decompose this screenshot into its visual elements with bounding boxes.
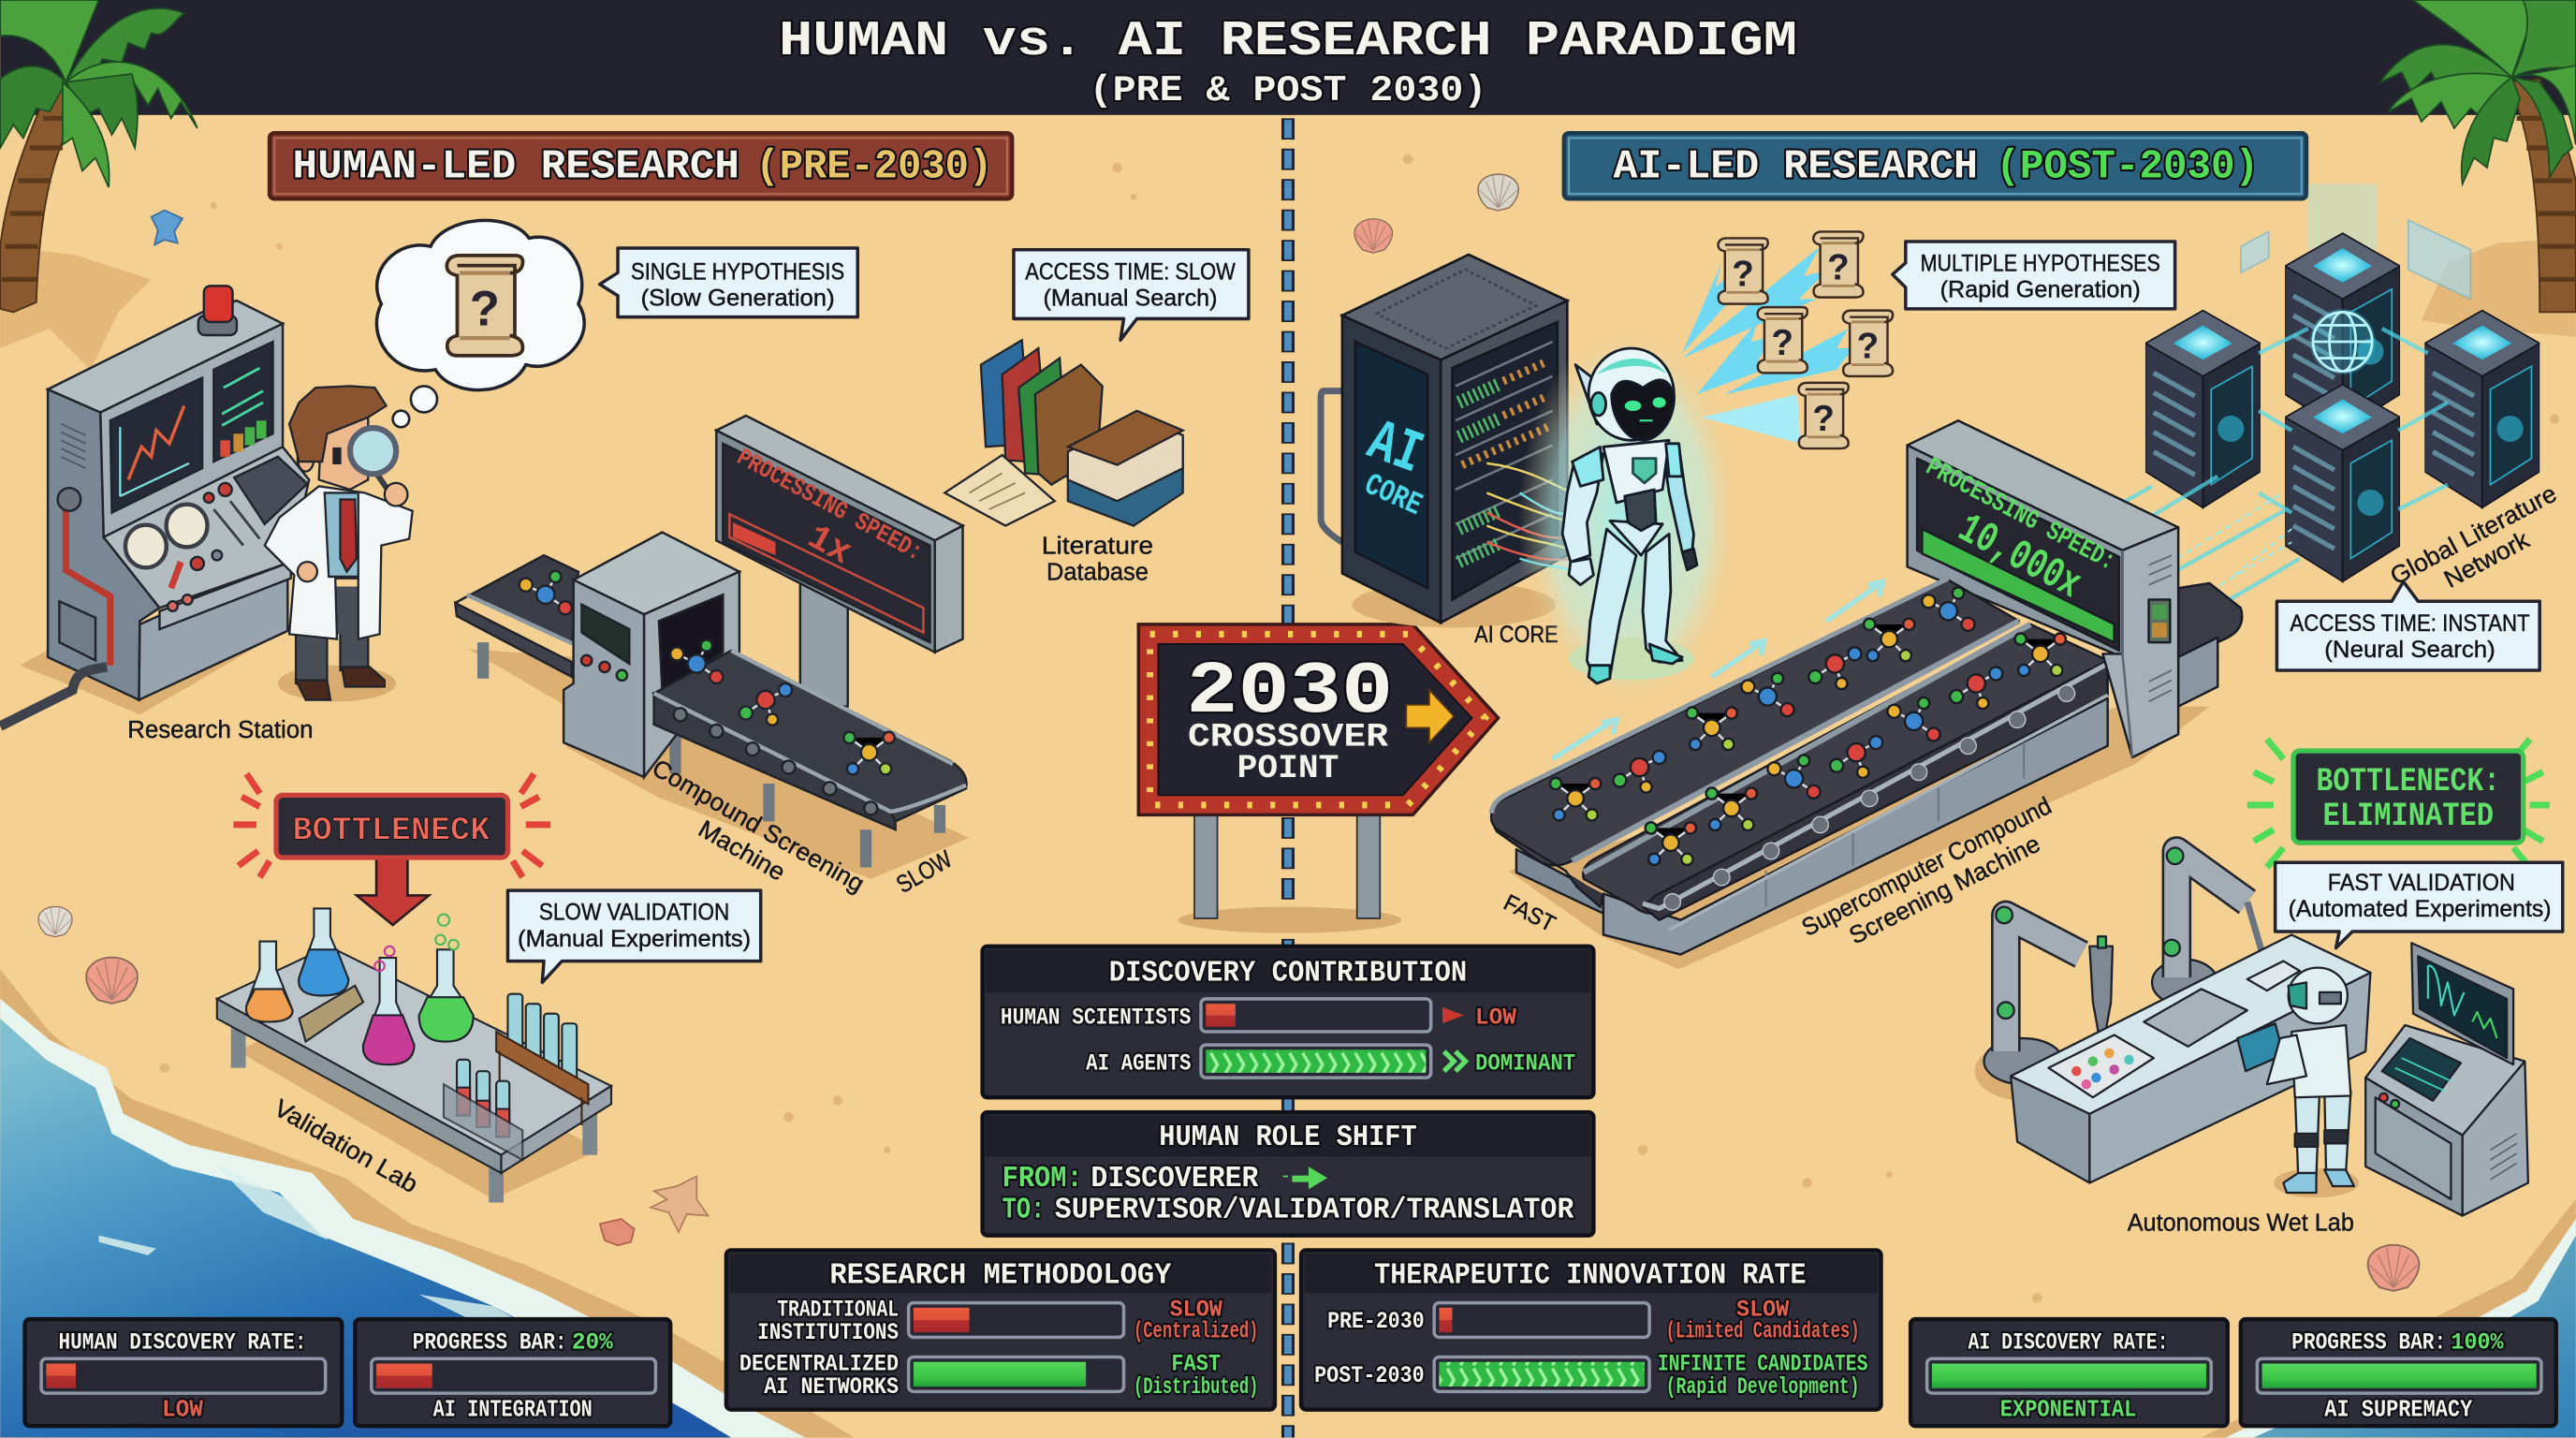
callout: slow validation: SLOW VALIDATION <box>539 901 729 926</box>
callout: single hypothesis <box>600 248 857 317</box>
panel: therapeutic innovation rate: (Rapid Development) <box>1666 1375 1860 1401</box>
label: supercomputer compound screening machine: Screening Machine <box>1844 829 2044 949</box>
compound screening machine <box>455 416 970 879</box>
AI robot <box>1518 324 1741 712</box>
right ocean and shoreline <box>2202 1199 2576 1437</box>
speed arrows on sand <box>1553 581 1882 759</box>
panel: research methodology: DECENTRALIZED <box>739 1353 899 1378</box>
label: global literature network: Global Literature <box>2385 479 2561 591</box>
hypotheses scrolls with beams: ? <box>1857 327 1879 367</box>
panel: human role shift: FROM: <box>1003 1163 1083 1196</box>
autonomous wet lab <box>1975 847 2528 1216</box>
callout: slow validation <box>507 890 761 982</box>
panel: human discovery rate <box>25 1319 342 1426</box>
label: validation lab: Validation Lab <box>270 1093 423 1198</box>
banner: human-led research: (PRE-2030) <box>755 144 992 191</box>
supercomputer compound screening machine: PROCESSING SPEED: <box>1921 453 2120 578</box>
left ocean and shoreline <box>0 969 855 1437</box>
callout: access time slow: ACCESS TIME: SLOW <box>1025 259 1237 285</box>
label: compound screening machine: Compound Screening <box>648 754 870 898</box>
row: human scientists <box>1001 999 1516 1032</box>
callout: access time slow: (Manual Search) <box>1044 286 1218 311</box>
left palm tree <box>0 0 198 370</box>
compound screening machine: 1x <box>800 517 858 574</box>
scientist <box>265 386 413 701</box>
supercomputer compound screening machine: 10,000x <box>1950 505 2088 609</box>
center dashed divider <box>1284 118 1292 1437</box>
bottleneck warning sign <box>233 774 550 925</box>
row: human scientists: HUMAN SCIENTISTS <box>1001 1005 1191 1031</box>
callout: fast validation <box>2276 862 2563 948</box>
bottleneck eliminated sign <box>2247 740 2550 868</box>
bottleneck eliminated sign: BOTTLENECK: <box>2317 763 2500 800</box>
right palm tree <box>2380 0 2576 337</box>
callout: fast validation: (Automated Experiments) <box>2289 897 2551 922</box>
panel: progress bar 100%: 100% <box>2451 1331 2504 1357</box>
2030 crossover sign <box>1138 624 1499 933</box>
bottleneck eliminated sign: ELIMINATED <box>2323 798 2494 835</box>
panel: research methodology <box>726 1250 1275 1410</box>
callout: multiple hypotheses: MULTIPLE HYPOTHESES <box>1921 252 2160 277</box>
banner: AI-led research: AI-LED RESEARCH <box>1613 144 1978 191</box>
sand specks <box>159 154 2559 1303</box>
callout: access time instant <box>2276 581 2539 670</box>
title <box>779 13 1797 111</box>
panel: progress bar 20%: 20% <box>572 1331 613 1357</box>
thought cloud with scroll <box>376 220 584 427</box>
2030 crossover sign: 2030 <box>1186 650 1393 734</box>
panel: human role shift: SUPERVISOR/VALIDATOR/TRANSLATOR <box>1055 1194 1573 1226</box>
validation lab table with flasks <box>217 908 611 1203</box>
label: autonomous wet lab: Autonomous Wet Lab <box>2128 1208 2354 1236</box>
callout: slow validation: (Manual Experiments) <box>518 927 751 952</box>
row: human scientists: LOW <box>1475 1005 1516 1031</box>
beach shells and starfish <box>38 174 2419 1291</box>
panel: progress bar 20% <box>355 1319 670 1426</box>
row: AI agents: AI AGENTS <box>1086 1051 1191 1077</box>
research station console <box>0 286 309 726</box>
panel: research methodology: FAST <box>1171 1353 1221 1378</box>
panel: progress bar 20%: AI INTEGRATION <box>433 1396 593 1424</box>
2030 crossover sign: CROSSOVER <box>1188 719 1389 756</box>
hypotheses scrolls with beams: ? <box>1812 399 1835 439</box>
banner: human-led research: HUMAN-LED RESEARCH <box>293 144 739 191</box>
panel: research methodology: SLOW <box>1170 1299 1222 1324</box>
thought cloud with scroll: ? <box>470 281 500 336</box>
panel: human role shift: HUMAN ROLE SHIFT <box>1159 1122 1417 1154</box>
panel: human role shift <box>983 1112 1593 1236</box>
title: HUMAN vs. AI RESEARCH PARADIGM <box>779 13 1797 69</box>
panel: human role shift: TO: <box>1003 1194 1045 1226</box>
row: AI agents: DOMINANT <box>1475 1051 1575 1077</box>
panel: research methodology: AI NETWORKS <box>764 1375 899 1401</box>
callout: access time slow <box>1014 250 1249 340</box>
callout: access time instant: (Neural Search) <box>2324 638 2496 663</box>
panel: discovery contribution <box>983 946 1593 1097</box>
row: AI agents <box>1086 1045 1575 1078</box>
hypotheses scrolls with beams: ? <box>1771 323 1793 363</box>
panel: AI discovery rate <box>1910 1319 2228 1426</box>
label: literature database <box>1042 531 1153 585</box>
hypotheses scrolls with beams: ? <box>1827 247 1850 287</box>
panel: therapeutic innovation rate: (Limited Candidates) <box>1666 1319 1860 1344</box>
callout: multiple hypotheses <box>1893 242 2175 309</box>
global literature network servers <box>2111 184 2539 616</box>
panel: human role shift: DISCOVERER <box>1090 1163 1258 1196</box>
panel: research methodology: INSTITUTIONS <box>757 1321 899 1346</box>
panel: human discovery rate: LOW <box>162 1396 203 1424</box>
AI core server rack: AI <box>1359 407 1431 489</box>
label: global literature network: Network <box>2439 525 2534 594</box>
header bar <box>0 0 2576 115</box>
panel: therapeutic innovation rate: SLOW <box>1736 1299 1789 1324</box>
panel: therapeutic innovation rate: THERAPEUTIC INNOVATION RATE <box>1374 1260 1807 1293</box>
hypotheses scrolls with beams <box>1682 231 1893 448</box>
hypotheses scrolls with beams: ? <box>1732 254 1754 294</box>
AI core server rack <box>1321 255 1573 627</box>
callout: single hypothesis: SINGLE HYPOTHESIS <box>631 259 844 285</box>
banner: human-led research <box>270 133 1012 198</box>
panel: research methodology: (Centralized) <box>1134 1319 1258 1344</box>
panel: discovery contribution: DISCOVERY CONTRIBUTION <box>1109 958 1467 990</box>
panel: therapeutic innovation rate: PRE-2030 <box>1327 1310 1425 1335</box>
panel: progress bar 20%: PROGRESS BAR: <box>413 1331 567 1357</box>
supercomputer compound screening machine <box>1491 420 2242 969</box>
callout: fast validation: FAST VALIDATION <box>2328 871 2515 896</box>
panel: progress bar 100%: AI SUPREMACY <box>2324 1396 2472 1424</box>
panel: research methodology: RESEARCH METHODOLOGY <box>829 1260 1171 1293</box>
label: compound screening machine: Machine <box>694 814 790 887</box>
panel: therapeutic innovation rate: INFINITE CANDIDATES <box>1658 1353 1867 1378</box>
panel: research methodology: TRADITIONAL <box>777 1299 899 1324</box>
callout: access time instant: ACCESS TIME: INSTANT <box>2290 611 2530 637</box>
callout: single hypothesis: (Slow Generation) <box>641 286 835 311</box>
2030 crossover sign: POINT <box>1237 750 1339 787</box>
callout: multiple hypotheses: (Rapid Generation) <box>1940 278 2141 303</box>
label: fast: FAST <box>1500 890 1559 937</box>
panel: therapeutic innovation rate: POST-2030 <box>1314 1364 1425 1389</box>
banner: AI-led research <box>1564 133 2306 198</box>
panel: AI discovery rate: EXPONENTIAL <box>2000 1396 2136 1424</box>
banner: AI-led research: (POST-2030) <box>1996 144 2259 191</box>
panel: AI discovery rate: AI DISCOVERY RATE: <box>1968 1331 2169 1357</box>
bottleneck warning sign: BOTTLENECK <box>293 813 490 850</box>
AI core server rack: CORE <box>1358 467 1427 524</box>
panel: therapeutic innovation rate <box>1301 1250 1881 1410</box>
icon: role arrow <box>1283 1168 1325 1188</box>
label: supercomputer compound screening machine: Supercomputer Compound <box>1797 791 2056 942</box>
label: literature database: Literature <box>1042 531 1153 559</box>
panel: human discovery rate: HUMAN DISCOVERY RATE: <box>59 1331 306 1357</box>
literature database books and scrolls <box>944 340 1183 526</box>
label: AI core: AI CORE <box>1474 623 1559 648</box>
panel: progress bar 100% <box>2241 1319 2556 1426</box>
label: research station: Research Station <box>127 715 314 743</box>
label: literature database: Database <box>1046 557 1149 585</box>
panel: progress bar 100%: PROGRESS BAR: <box>2291 1331 2446 1357</box>
label: slow: SLOW <box>891 844 957 899</box>
compound screening machine: PROCESSING SPEED: <box>732 444 927 567</box>
panel: research methodology: (Distributed) <box>1134 1375 1258 1401</box>
title: (PRE & POST 2030) <box>1090 70 1486 111</box>
